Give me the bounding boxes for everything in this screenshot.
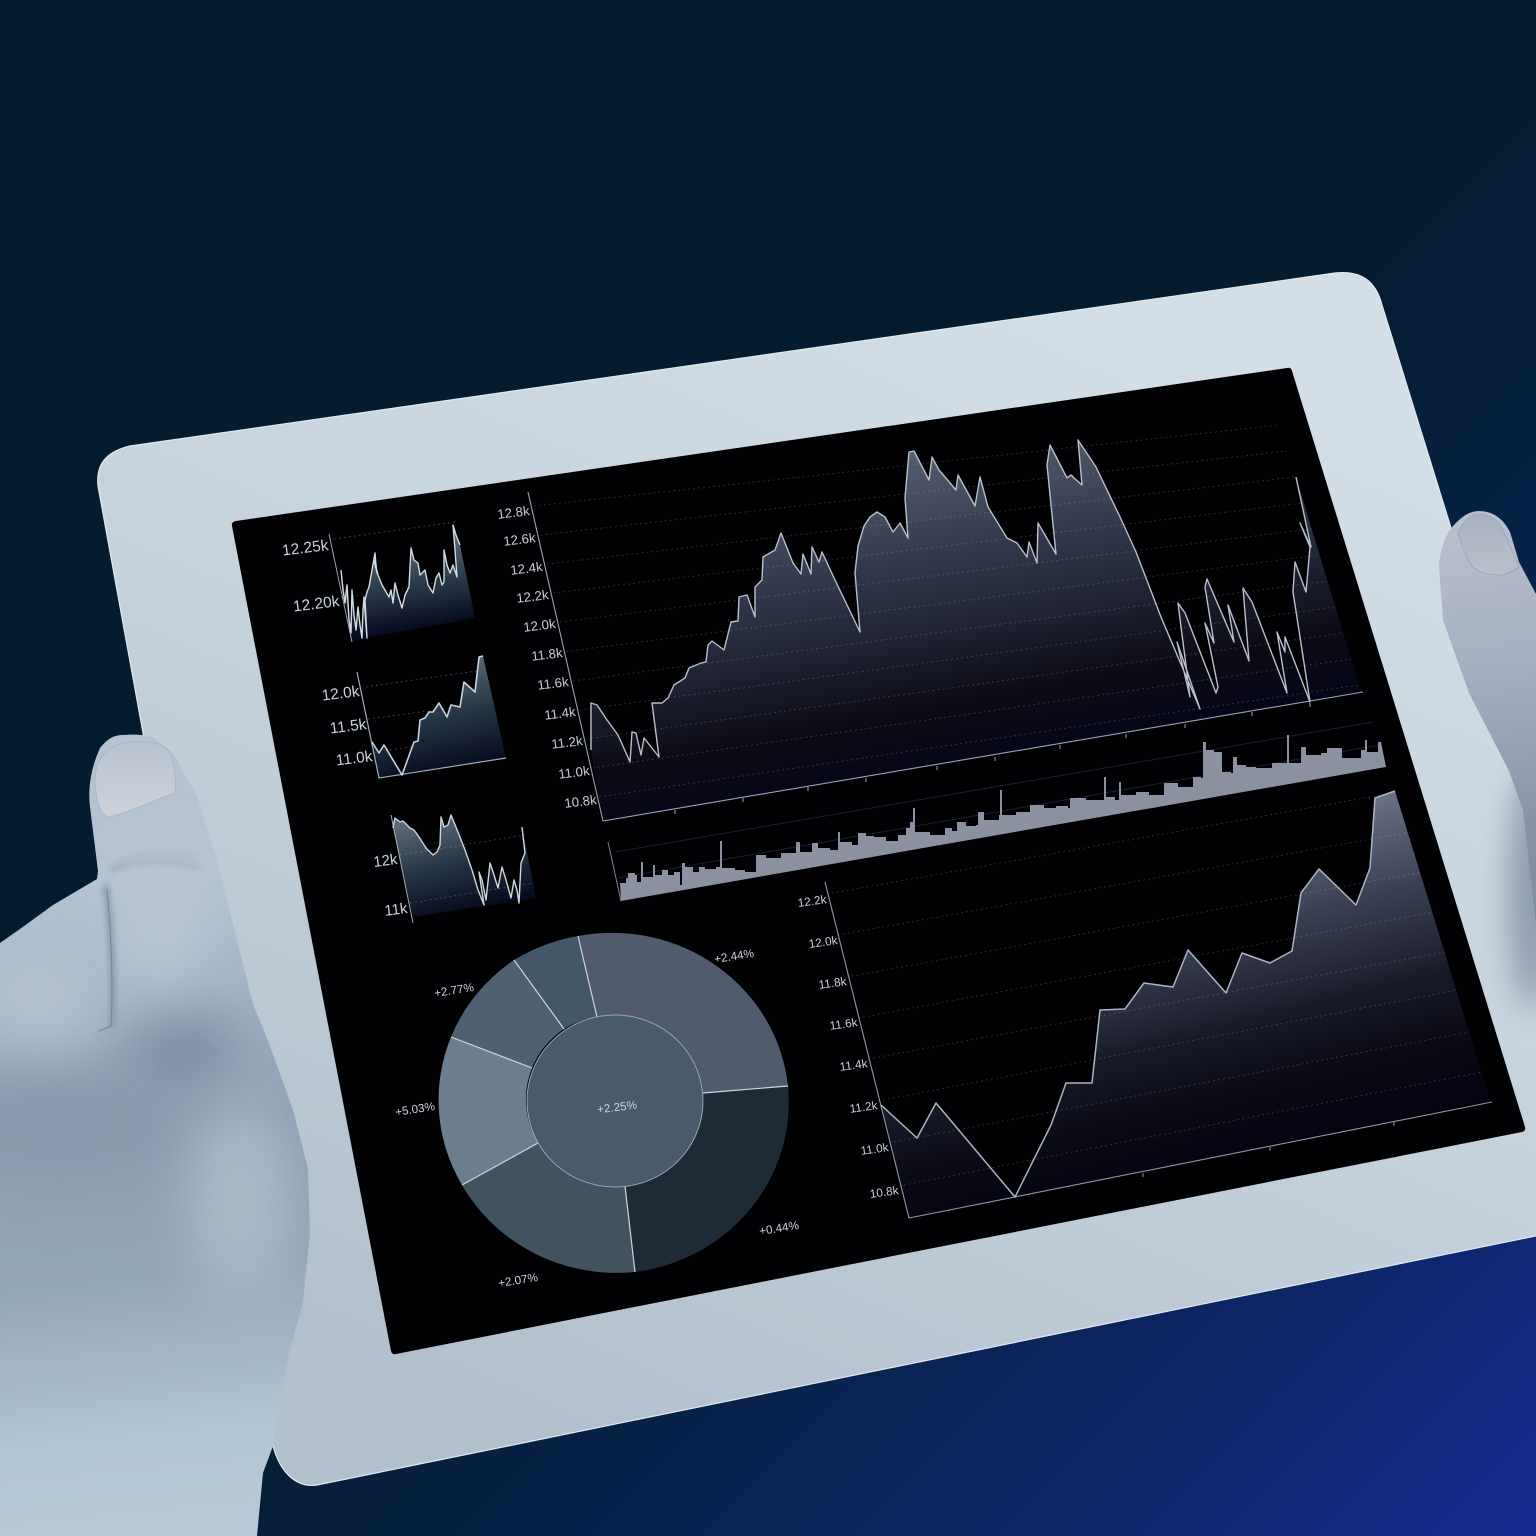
main chart area fill: [591, 440, 1362, 821]
donut labels: +0.44%: [758, 1219, 800, 1238]
main chart axis labels: 11.4k: [543, 704, 577, 723]
main chart axis labels: 11.6k: [536, 674, 570, 693]
lower area chart: [797, 791, 1492, 1218]
tablet: [98, 273, 1536, 1485]
small chart 3: [372, 815, 536, 923]
small chart 2: 11.0k: [335, 748, 374, 769]
lower chart axis labels: 11.0k: [860, 1140, 890, 1158]
small chart 1: 12.20k: [292, 593, 341, 616]
donut labels: +2.44%: [713, 947, 755, 966]
left hand: [0, 735, 310, 1536]
small chart 2: 12.0k: [321, 683, 361, 705]
hand shading: [0, 820, 285, 1300]
thumbnail: [95, 742, 175, 817]
tablet bezel: [98, 273, 1536, 1485]
small chart 1: [281, 522, 475, 642]
main chart axis labels: 11.8k: [530, 645, 564, 664]
right hand: [1439, 511, 1536, 926]
donut chart: [394, 933, 800, 1290]
small chart 1: 12.25k: [281, 537, 330, 560]
lower chart axis labels: 11.2k: [849, 1098, 879, 1116]
lower chart axis labels: 11.6k: [829, 1015, 859, 1033]
main chart axis labels: 12.6k: [503, 530, 537, 549]
main chart axis labels: [497, 503, 598, 811]
lower chart axis labels: 11.4k: [839, 1056, 869, 1074]
donut labels: +2.77%: [433, 981, 475, 1000]
lower chart axis labels: 11.8k: [818, 974, 848, 992]
volume bar chart: [608, 722, 1386, 901]
donut labels: +2.25%: [596, 1099, 638, 1116]
lower chart axis labels: [797, 892, 900, 1201]
main chart axis labels: 12.8k: [497, 503, 531, 522]
main area chart: [497, 425, 1363, 821]
lower chart axis labels: 12.2k: [797, 892, 828, 910]
small chart 2: [321, 656, 506, 778]
lower chart line: [881, 791, 1395, 1197]
small chart 3: 11k: [384, 900, 409, 920]
donut labels: +5.03%: [394, 1100, 436, 1119]
lower chart axis labels: 10.8k: [869, 1183, 900, 1201]
main chart axis labels: 12.0k: [523, 616, 557, 635]
tablet screen: [232, 368, 1525, 1354]
small chart 3: 12k: [372, 851, 399, 871]
donut labels: +2.07%: [497, 1271, 539, 1290]
main chart axis labels: 12.2k: [516, 587, 550, 606]
small chart 2: 11.5k: [329, 716, 368, 737]
main chart axis labels: 12.4k: [510, 559, 544, 578]
main chart axis labels: 10.8k: [564, 792, 598, 811]
lower chart axis labels: 12.0k: [808, 933, 839, 951]
main chart line: [591, 440, 1311, 762]
donut labels: [394, 947, 800, 1290]
hand shadow on bezel: [1510, 770, 1536, 1010]
right thumbnail: [1458, 514, 1519, 575]
main chart axis labels: 11.2k: [550, 733, 584, 752]
main chart axis labels: 11.0k: [557, 763, 591, 782]
